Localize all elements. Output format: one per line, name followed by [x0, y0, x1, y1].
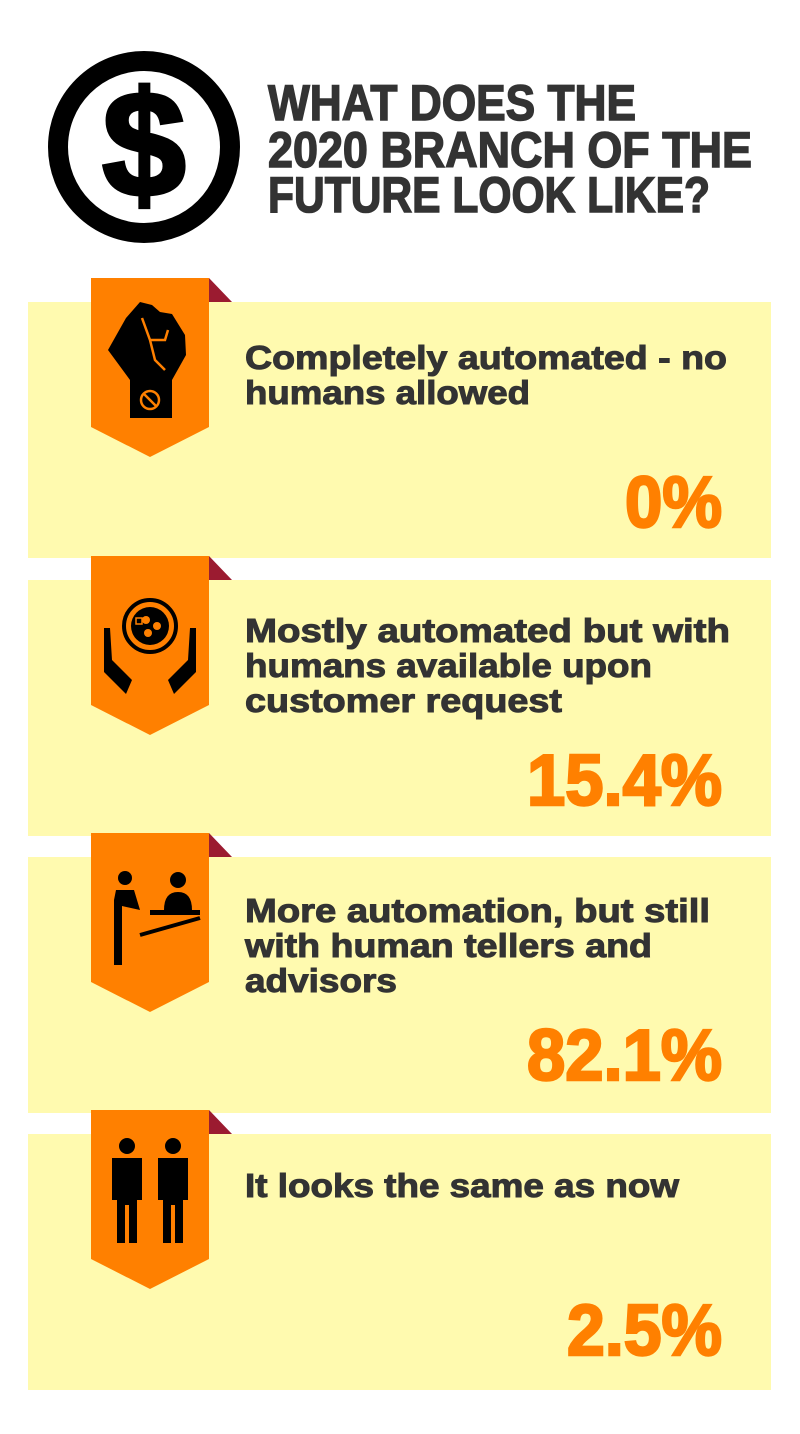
- percent: 2.5%: [567, 1291, 722, 1371]
- panel: mostly automated: [28, 556, 771, 836]
- panel: more automation: advisors: [245, 962, 397, 999]
- icon: teller: [114, 871, 200, 965]
- ribbon: [91, 1110, 209, 1289]
- panel: looks the same: [28, 1110, 771, 1390]
- icon: dollar coin: $: [102, 60, 186, 228]
- ribbon: [91, 833, 209, 1012]
- ribbon: [91, 556, 209, 735]
- text: Mostly automated but with: [245, 612, 730, 649]
- icon: dollar coin: [58, 60, 230, 233]
- percent: 15.4%: [527, 741, 722, 821]
- title: 2020 BRANCH OF THE: [268, 122, 752, 178]
- text: It looks the same as now: [245, 1167, 679, 1204]
- panel: mostly automated: humans available upon: [245, 647, 652, 684]
- icon: two people: [112, 1138, 188, 1243]
- panel: mostly automated: customer request: [245, 682, 562, 719]
- title: WHAT DOES THE: [268, 75, 636, 131]
- icon: fist: [108, 302, 186, 418]
- percent: 0%: [625, 463, 722, 543]
- panel: completely automated: humans allowed: [245, 374, 530, 411]
- panel: more automation: with human tellers and: [244, 927, 652, 964]
- ribbon: [91, 278, 209, 457]
- panel: more automation: [28, 833, 771, 1113]
- icon: hands with globe: [104, 600, 196, 694]
- text: Completely automated - no: [245, 339, 727, 376]
- title: [268, 75, 752, 223]
- title: FUTURE LOOK LIKE?: [268, 167, 710, 223]
- panel: completely automated: [28, 278, 771, 558]
- percent: 82.1%: [527, 1016, 722, 1096]
- text: More automation, but still: [245, 892, 710, 929]
